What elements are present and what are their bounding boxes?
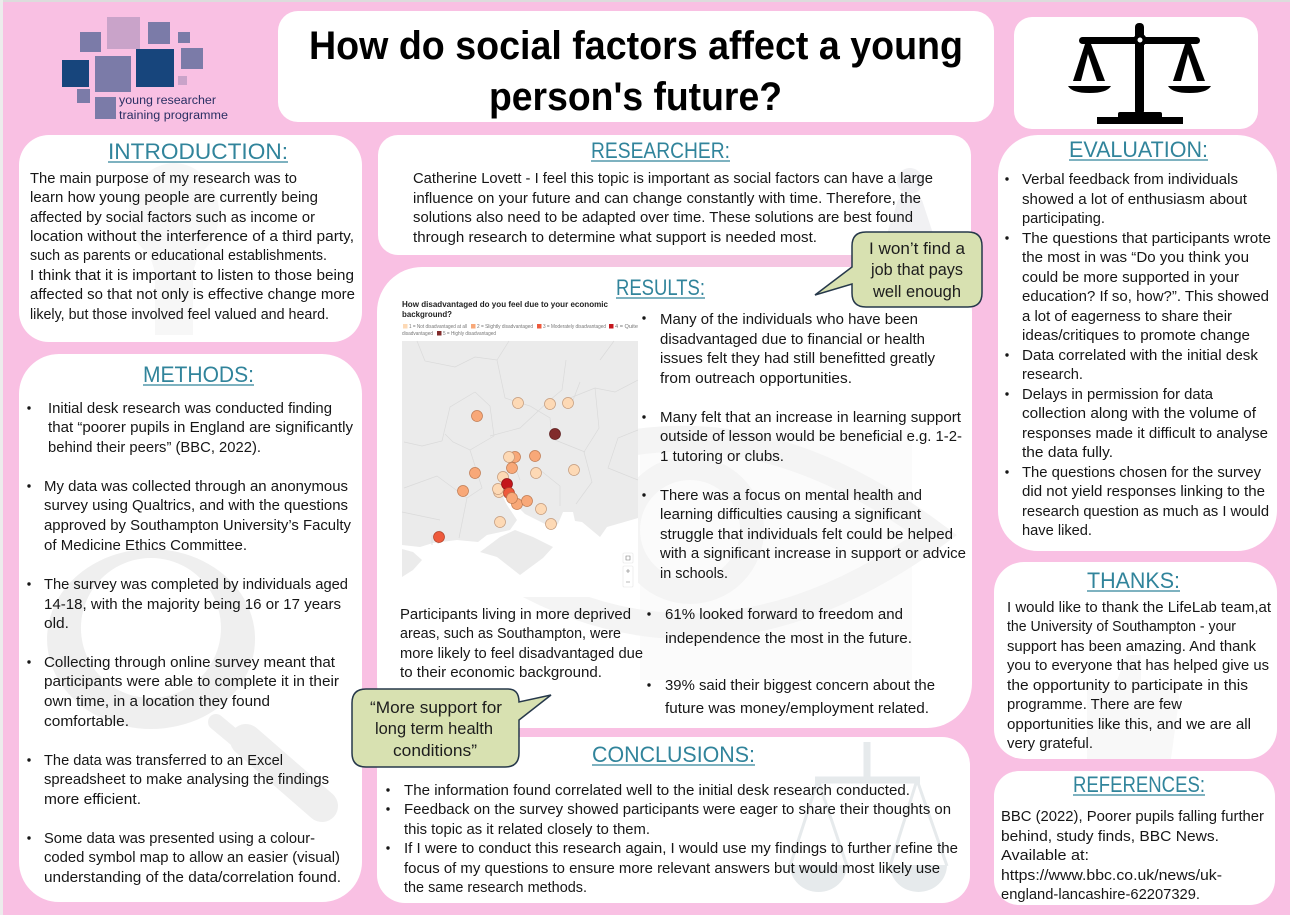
title panel: [278, 11, 994, 122]
list: results bullets: [642, 312, 966, 717]
text: introduction body: The main purpose of my research was to: [30, 171, 297, 187]
list: results bullets: Many felt that an increase in learning support: [660, 410, 961, 426]
list: methods bullets: approved by Southampton University’s Faculty: [44, 518, 352, 534]
list: evaluation bullets: collection along with the volume of: [1022, 406, 1256, 422]
panel: thanks: [994, 562, 1277, 759]
list: evaluation bullets: responses made it difficult to analyse: [1022, 426, 1268, 442]
list: results bullets: There was a focus on mental health and: [660, 488, 922, 504]
heading: thanks: THANKS:: [1087, 568, 1180, 593]
text: introduction body: learn how young people are currently being: [30, 190, 318, 206]
list: methods bullets: Collecting through online survey meant that: [44, 655, 335, 671]
list: evaluation bullets: the most in was “Do you think you: [1022, 250, 1249, 266]
panel: introduction: [19, 135, 362, 342]
list: conclusions bullets: If I were to conduct this research again, I would use my findings to further refine the: [404, 841, 958, 857]
list: evaluation bullets: showed a lot of enthusiasm about: [1022, 192, 1247, 208]
text: researcher statement: influence on your future and can change constantly with time. Therefore, the: [413, 191, 921, 207]
list: methods bullets: survey using Qualtrics, and with the questions: [44, 498, 348, 514]
list: results bullets: disadvantaged due to financial or health: [660, 332, 925, 348]
list: conclusions bullets: this topic as it related closely to them.: [404, 822, 650, 838]
list: results bullets: in schools.: [660, 566, 728, 582]
list: conclusions bullets: the same research methods.: [404, 880, 587, 896]
list: results bullets: future was money/employment related.: [665, 701, 929, 717]
callout: more support for long term health conditions: conditions”: [393, 742, 477, 760]
map legend: 5 = Highly disadvantaged: [443, 331, 496, 337]
list: results bullets: issues felt they had still benefitted greatly: [660, 351, 936, 367]
text: thanks body: programme. There are few: [1007, 697, 1183, 713]
text: thanks body: the opportunity to participate in this: [1007, 678, 1248, 694]
list: methods bullets: of Medicine Ethics Committee.: [44, 538, 247, 554]
panel: conclusions: [377, 737, 970, 903]
list: results bullets: with a significant increase in support or advice: [659, 546, 966, 562]
list: conclusions bullets: [386, 783, 958, 896]
list: evaluation bullets: The questions chosen for the survey: [1022, 465, 1262, 481]
text: map caption: to their economic background.: [400, 665, 602, 681]
list: methods bullets: old.: [44, 616, 69, 632]
list: results bullets: Many of the individuals who have been: [660, 312, 918, 328]
list: results bullets: 1 tutoring or clubs.: [660, 449, 784, 465]
list: methods bullets: understanding of the data/correlation found.: [44, 870, 341, 886]
list: results bullets: 39% said their biggest concern about the: [665, 678, 935, 694]
text: thanks body: [1007, 600, 1271, 752]
list: evaluation bullets: research question as much as I would: [1022, 504, 1269, 520]
list: results bullets: from outreach opportunities.: [660, 371, 852, 387]
chart title: How disadvantaged do you feel due to your economic: [402, 299, 608, 309]
text: researcher statement: [413, 171, 933, 246]
list: evaluation bullets: Delays in permission for data: [1022, 387, 1213, 403]
list: methods bullets: coded symbol map to allow an easier (visual): [44, 850, 340, 866]
text: introduction body: location without the interference of a third party,: [30, 229, 354, 245]
list: methods bullets: The data was transferred to an Excel: [44, 753, 283, 769]
list: evaluation bullets: Verbal feedback from individuals: [1022, 172, 1238, 188]
list: results bullets: struggle that individuals felt could be helped: [660, 527, 953, 543]
title panel: How do social factors affect a young: [309, 24, 963, 68]
map legend: 2 = Slightly disadvantaged: [477, 324, 533, 330]
heading: references: REFERENCES:: [1073, 772, 1205, 797]
map legend: 3 = Moderately disadvantaged: [543, 324, 606, 330]
list: conclusions bullets: focus of my questions to ensure more relevant answers but would most likely use: [404, 861, 940, 877]
list: evaluation bullets: participating.: [1022, 211, 1105, 227]
panel: evaluation: [998, 135, 1277, 551]
list: methods bullets: spreadsheet to make analysing the findings: [44, 772, 329, 788]
text: introduction body: likely, but those involved feel valued and heard.: [30, 307, 329, 323]
text: references body: Available at:: [1001, 848, 1089, 864]
list: methods bullets: comfortable.: [44, 714, 129, 730]
list: methods bullets: behind their peers” (BBC, 2022).: [48, 440, 261, 456]
text: map caption: [400, 607, 643, 681]
list: results bullets: 61% looked forward to freedom and: [665, 607, 903, 623]
list: evaluation bullets: Data correlated with the initial desk: [1022, 348, 1259, 364]
heading: methods: METHODS:: [143, 362, 254, 387]
chart title: [402, 299, 608, 319]
heading: researcher: RESEARCHER:: [591, 138, 730, 163]
list: evaluation bullets: did not yield responses linking to the: [1022, 484, 1265, 500]
text: introduction body: I think that it is important to listen to those being: [30, 268, 354, 284]
list: evaluation bullets: [1005, 172, 1271, 539]
callout: more support for long term health conditions: long term health: [375, 720, 493, 738]
list: methods bullets: Initial desk research was conducted finding: [48, 401, 332, 417]
logo: young researcher training programme: training programme: [119, 110, 228, 122]
text: references body: [1001, 809, 1264, 903]
heading: results: RESULTS:: [616, 275, 705, 300]
callout: I won't find a job: I won’t find a: [869, 240, 966, 258]
list: methods bullets: The survey was completed by individuals aged: [44, 577, 348, 593]
list: methods bullets: more efficient.: [44, 792, 141, 808]
list: methods bullets: 14-18, with the majority being 16 or 17 years: [44, 597, 341, 613]
list: conclusions bullets: The information found correlated well to the initial desk research conducted.: [404, 783, 910, 799]
list: results bullets: independence the most in the future.: [665, 631, 912, 647]
text: thanks body: the University of Southampton - your: [1007, 619, 1236, 635]
text: thanks body: you to everyone that has helped give us: [1007, 658, 1269, 674]
title panel: person's future?: [489, 75, 782, 119]
map legend: 4 = Quite: [615, 324, 638, 330]
list: results bullets: learning difficulties causing a significant: [660, 507, 921, 523]
list: methods bullets: Some data was presented using a colour-: [44, 831, 315, 847]
text: thanks body: I would like to thank the LifeLab team,at: [1007, 600, 1271, 616]
text: introduction body: [30, 171, 355, 323]
list: evaluation bullets: The questions that participants wrote: [1022, 231, 1271, 247]
icon: eye watermark: [445, 430, 935, 680]
logo: young researcher training programme: [62, 17, 228, 122]
text: thanks body: opportunities like this, and we are all: [1007, 717, 1251, 733]
text: map caption: areas, such as Southampton, were: [400, 626, 621, 642]
list: evaluation bullets: have liked.: [1022, 523, 1092, 539]
text: introduction body: affected by social factors such as income or: [30, 210, 315, 226]
text: references body: BBC (2022), Poorer pupils falling further: [1001, 809, 1264, 825]
list: methods bullets: that “poorer pupils in England are significantly: [48, 420, 354, 436]
map legend: disadvantaged: [402, 331, 433, 337]
text: references body: https://www.bbc.co.uk/news/uk-: [1001, 868, 1222, 884]
text: thanks body: support has been amazing. And thank: [1007, 639, 1257, 655]
text: researcher statement: through research to determine what support is needed most.: [413, 230, 817, 246]
callout: more support for long term health conditions: “More support for: [370, 699, 503, 717]
list: evaluation bullets: research.: [1022, 367, 1083, 383]
callout: I won't find a job: well enough: [872, 283, 961, 301]
heading: introduction: INTRODUCTION:: [108, 139, 288, 164]
chart title: background?: [402, 309, 452, 319]
list: evaluation bullets: ideas/critiques to promote change: [1022, 328, 1250, 344]
callout: I won't find a job: [815, 232, 982, 307]
list: methods bullets: My data was collected through an anonymous: [44, 479, 348, 495]
map data points: [434, 398, 580, 542]
text: thanks body: very grateful.: [1007, 736, 1093, 752]
list: evaluation bullets: a lot of eagerness to share their: [1022, 309, 1232, 325]
list: methods bullets: own time, in a location they found: [44, 694, 270, 710]
list: evaluation bullets: could be more supported in your: [1022, 270, 1239, 286]
list: results bullets: outside of lesson would be beneficial e.g. 1-2-: [660, 429, 962, 445]
heading: evaluation: EVALUATION:: [1069, 137, 1208, 162]
map legend: [402, 324, 638, 337]
icon: magnifying glass watermark: [47, 549, 322, 806]
map legend: 1 = Not disadvantaged at all: [409, 324, 467, 330]
panel: references: [994, 771, 1275, 905]
callout: I won't find a job: job that pays: [870, 261, 963, 279]
heading: conclusions: CONCLUSIONS:: [592, 742, 755, 767]
panel: results: [377, 267, 972, 728]
panel: methods: [19, 354, 362, 902]
list: evaluation bullets: the data fully.: [1022, 445, 1113, 461]
text: references body: behind, study finds, BBC News.: [1001, 829, 1219, 845]
list: evaluation bullets: education? If so, how?”. This showed: [1022, 289, 1269, 305]
panel: researcher: [378, 135, 971, 255]
list: methods bullets: participants were able to complete it in their: [44, 674, 339, 690]
icon: scales watermark: [790, 742, 947, 892]
text: researcher statement: Catherine Lovett - I feel this topic is important as social factors can have a large: [413, 171, 933, 187]
text: introduction body: affected so that not only is effective change more: [30, 287, 355, 303]
text: references body: england-lancashire-62207329.: [1001, 887, 1200, 903]
map base: [402, 341, 638, 597]
text: researcher statement: solutions also need to be adapted over time. These solutions are best found: [413, 210, 913, 226]
logo: young researcher training programme: young researcher: [119, 95, 216, 107]
panel: scales icon: [1014, 17, 1258, 129]
text: map caption: Participants living in more deprived: [400, 607, 631, 623]
chart: symbol map of disadvantage: [402, 299, 638, 597]
list: conclusions bullets: Feedback on the survey showed participants were eager to share their thoughts on: [404, 802, 951, 818]
text: introduction body: such as parents or educational establishments.: [30, 248, 327, 264]
text: map caption: more likely to feel disadvantaged due: [400, 646, 643, 662]
callout: more support for long term health conditions: [352, 689, 551, 767]
list: methods bullets: [27, 401, 354, 886]
